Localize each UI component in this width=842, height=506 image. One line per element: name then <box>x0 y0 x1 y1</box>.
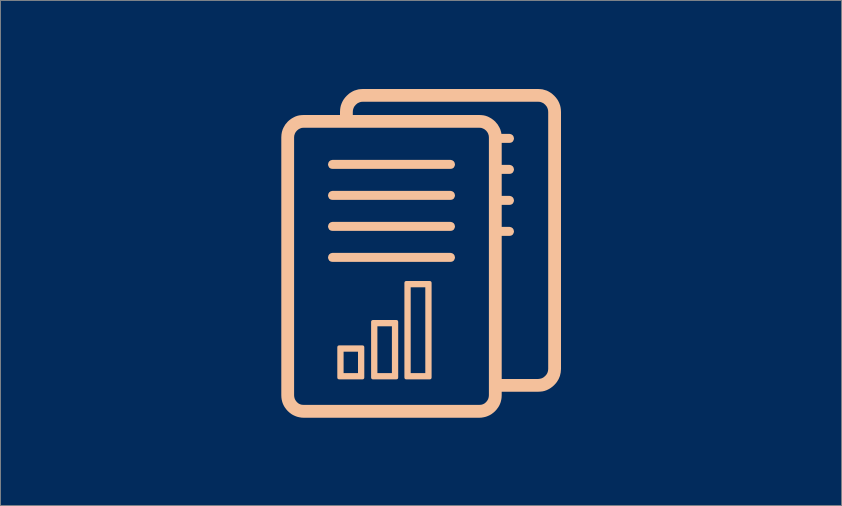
chart bar: short <box>337 345 364 379</box>
bar chart <box>337 281 432 379</box>
icon: back document binding tabs <box>500 138 510 231</box>
icon: back document <box>346 95 555 385</box>
text lines on front document <box>332 164 450 257</box>
icon: document stack <box>288 95 555 411</box>
icon: front document <box>288 121 495 411</box>
chart bar: medium <box>371 320 398 379</box>
chart bar: tall <box>404 281 432 379</box>
